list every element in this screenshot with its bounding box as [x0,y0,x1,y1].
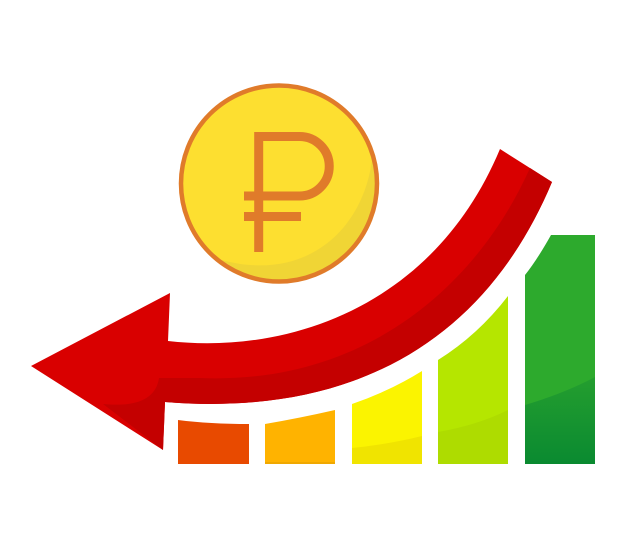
infographic: falling ruble exchange rate [31,83,595,464]
bar chart: rising coloured bars [178,235,595,464]
arrow: red curved downward arrow [31,149,552,450]
bar: green [525,235,595,464]
icon: ruble coin [181,86,385,290]
bar: yellow [352,371,422,464]
bar: red-orange [178,420,249,464]
bar: orange [265,410,335,464]
bar: lime [438,296,508,464]
